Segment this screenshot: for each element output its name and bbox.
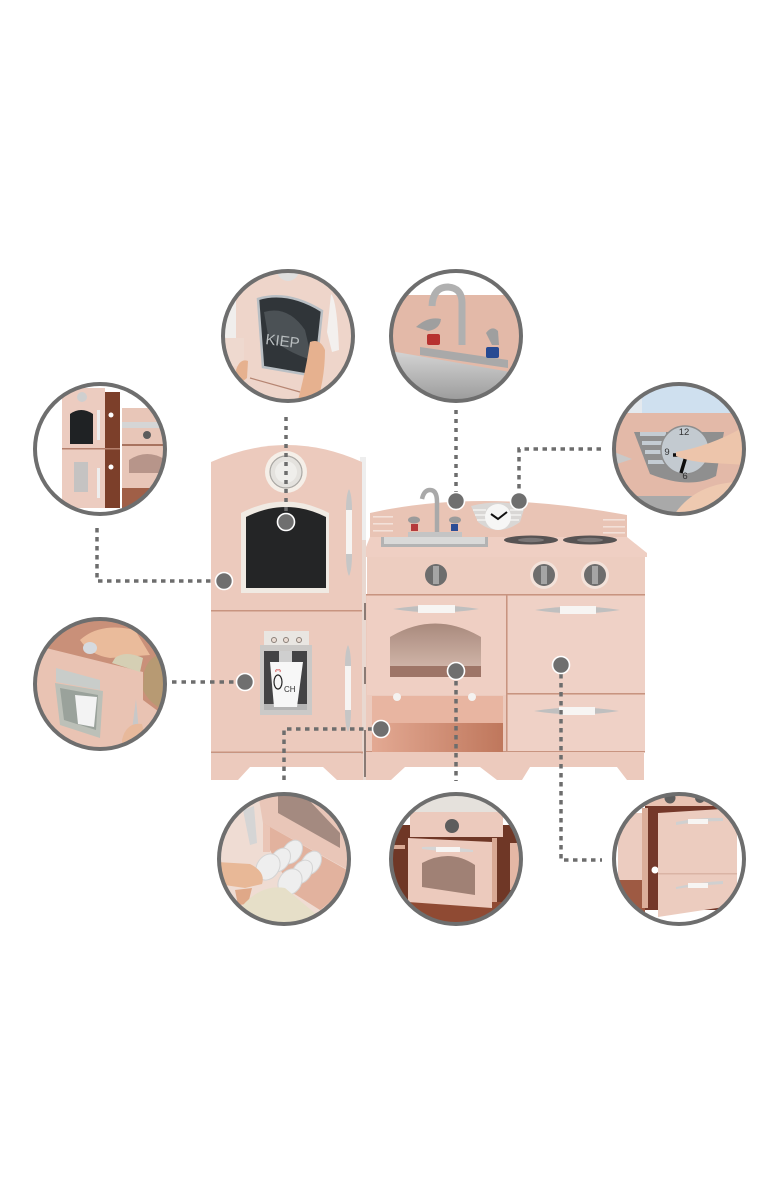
door handle xyxy=(535,606,620,614)
connector: chalkboard xyxy=(284,417,288,522)
chalkboard in circle xyxy=(258,296,322,376)
clock face xyxy=(661,426,709,474)
drawer handle xyxy=(534,707,619,715)
cubby side panel xyxy=(320,888,347,925)
circle: clock detail xyxy=(612,382,748,516)
water dispenser: CH xyxy=(284,685,296,694)
side handle xyxy=(132,699,139,732)
child's hand right xyxy=(298,341,325,400)
oven door side xyxy=(618,813,642,880)
circle ring xyxy=(614,794,744,924)
cup in hand xyxy=(83,642,97,654)
fridge upper handle xyxy=(346,489,352,576)
open oven door xyxy=(408,838,492,908)
pink wall xyxy=(612,413,746,497)
fridge seam lines xyxy=(211,610,363,754)
white handle xyxy=(327,294,339,352)
steel bottom xyxy=(637,496,692,512)
door seam xyxy=(250,378,300,392)
clock wings xyxy=(634,432,724,483)
fridge open side xyxy=(105,392,120,508)
cream cloth xyxy=(112,654,143,672)
child's knee xyxy=(235,888,252,905)
kitchen: stove and sink unit xyxy=(366,490,647,780)
handle xyxy=(243,806,257,845)
circle: chalkboard detail xyxy=(220,259,356,404)
thumb and hand xyxy=(676,482,732,512)
circle: cubby with plates xyxy=(217,792,352,930)
interior background xyxy=(48,621,158,710)
mini gauge xyxy=(77,392,87,402)
plates xyxy=(251,836,326,900)
dispenser panel xyxy=(56,668,100,690)
connector: dispenser xyxy=(172,680,245,684)
circle ring xyxy=(391,271,521,401)
pink backsplash xyxy=(390,295,522,375)
circle ring xyxy=(35,384,165,514)
mini dispenser xyxy=(74,462,88,492)
clock numerals xyxy=(664,427,689,482)
fridge side edge with hinges xyxy=(361,540,366,780)
fluffy rug xyxy=(240,887,317,930)
door handle xyxy=(676,818,723,825)
dispenser frame xyxy=(55,683,103,738)
connector: drawers xyxy=(561,665,602,860)
knob xyxy=(445,819,459,833)
control panel xyxy=(367,557,645,594)
oven window xyxy=(390,624,481,677)
fridge door xyxy=(37,648,143,747)
oven window xyxy=(422,856,475,895)
oven handle xyxy=(393,605,479,613)
fridge lower door xyxy=(211,611,362,752)
faucet base plate xyxy=(420,347,508,368)
child's arm xyxy=(217,862,263,888)
tap in wall xyxy=(616,453,632,464)
stove in background xyxy=(122,408,163,488)
clock hands xyxy=(673,453,687,473)
drawer handle xyxy=(676,881,723,889)
clock numerals: 9 xyxy=(664,447,670,458)
circle: faucet detail xyxy=(390,270,522,402)
mini cup xyxy=(75,695,97,727)
connector: clock xyxy=(519,449,601,500)
oven body xyxy=(258,793,352,872)
circle: drawers open xyxy=(612,792,746,926)
connector: storage side xyxy=(97,528,224,581)
connector: cubby xyxy=(284,729,381,780)
floor xyxy=(389,902,523,926)
circle: hinged storage view xyxy=(34,383,168,515)
clock numerals: 6 xyxy=(682,471,688,482)
chalkboard xyxy=(241,502,329,593)
circle ring xyxy=(223,271,353,401)
top panel xyxy=(630,792,730,806)
connector: oven xyxy=(454,672,458,781)
cubby left edge xyxy=(263,823,270,852)
oven door xyxy=(367,596,506,695)
side holes xyxy=(108,412,114,418)
burners xyxy=(504,536,617,544)
cabinet walls xyxy=(492,838,497,908)
water dispenser xyxy=(260,631,312,715)
hot tap xyxy=(416,318,441,345)
gauge top xyxy=(278,273,298,281)
kitchen: refrigerator unit xyxy=(211,445,366,780)
fridge white side strip xyxy=(360,457,366,541)
child's hand xyxy=(122,724,148,750)
stove base xyxy=(366,752,644,780)
oven window xyxy=(278,796,340,848)
circle: oven door open xyxy=(389,792,523,926)
steel sink xyxy=(395,352,508,399)
window background xyxy=(642,386,730,413)
top counter xyxy=(405,796,505,812)
circle ring xyxy=(35,619,165,749)
fridge front panel xyxy=(62,388,105,508)
interior xyxy=(645,806,737,910)
control knobs xyxy=(425,561,609,589)
fridge lower handle xyxy=(345,645,351,732)
infographic canvas xyxy=(33,269,746,926)
faucet xyxy=(408,490,462,537)
right cabinet drawer xyxy=(508,695,645,751)
clock numerals: 12 xyxy=(679,427,689,438)
control panel xyxy=(410,812,503,837)
faucet spout xyxy=(432,287,462,345)
fridge base xyxy=(211,754,363,780)
sink basin xyxy=(381,537,488,547)
open cubby xyxy=(372,693,503,752)
backsplash xyxy=(370,501,627,537)
blonde hair xyxy=(143,655,168,712)
connector: sink xyxy=(454,410,458,500)
clock xyxy=(471,502,525,530)
chalk writing: KIEP xyxy=(265,331,301,352)
cabinet interior xyxy=(389,825,523,926)
cabinet backing xyxy=(366,594,645,752)
circle ring xyxy=(219,794,349,924)
gauge dial xyxy=(265,451,307,493)
oven handle xyxy=(422,847,473,852)
circle: dispenser detail xyxy=(30,618,170,752)
open cabinet door xyxy=(658,808,737,917)
mini chalkboard xyxy=(70,410,93,444)
cabinet seam lines xyxy=(366,594,645,752)
marker dots xyxy=(216,492,570,738)
countertop xyxy=(366,537,647,557)
cold tap xyxy=(486,328,499,358)
cubby interior xyxy=(263,823,347,910)
circle ring xyxy=(614,384,744,514)
finger xyxy=(676,430,742,464)
right cabinet door xyxy=(508,596,645,693)
circle ring xyxy=(391,794,521,924)
child's arm xyxy=(80,628,150,658)
mini handle xyxy=(97,410,100,440)
child's hand left xyxy=(236,360,248,380)
backsplash stripes xyxy=(373,516,625,534)
lower door extension xyxy=(143,700,157,730)
fridge upper door xyxy=(211,445,362,610)
